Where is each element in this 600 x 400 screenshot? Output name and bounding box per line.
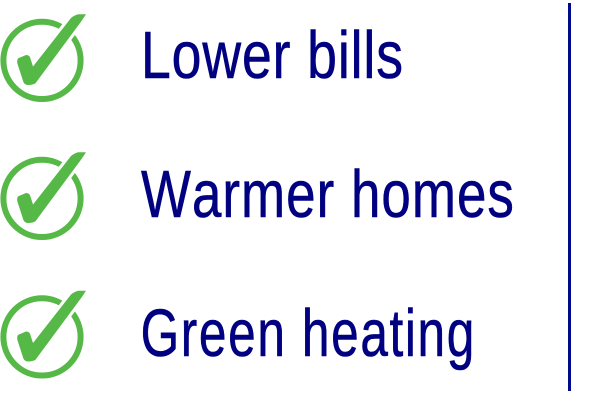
label: Lower bills: Lower bills	[141, 17, 403, 92]
icon: check mark 2	[3, 152, 86, 237]
icon: check mark 3	[3, 291, 86, 376]
label: Green heating: Green heating	[141, 297, 474, 371]
icon: check mark 1	[3, 14, 86, 99]
vertical divider line	[568, 3, 571, 391]
label: Warmer homes: Warmer homes	[141, 156, 514, 231]
